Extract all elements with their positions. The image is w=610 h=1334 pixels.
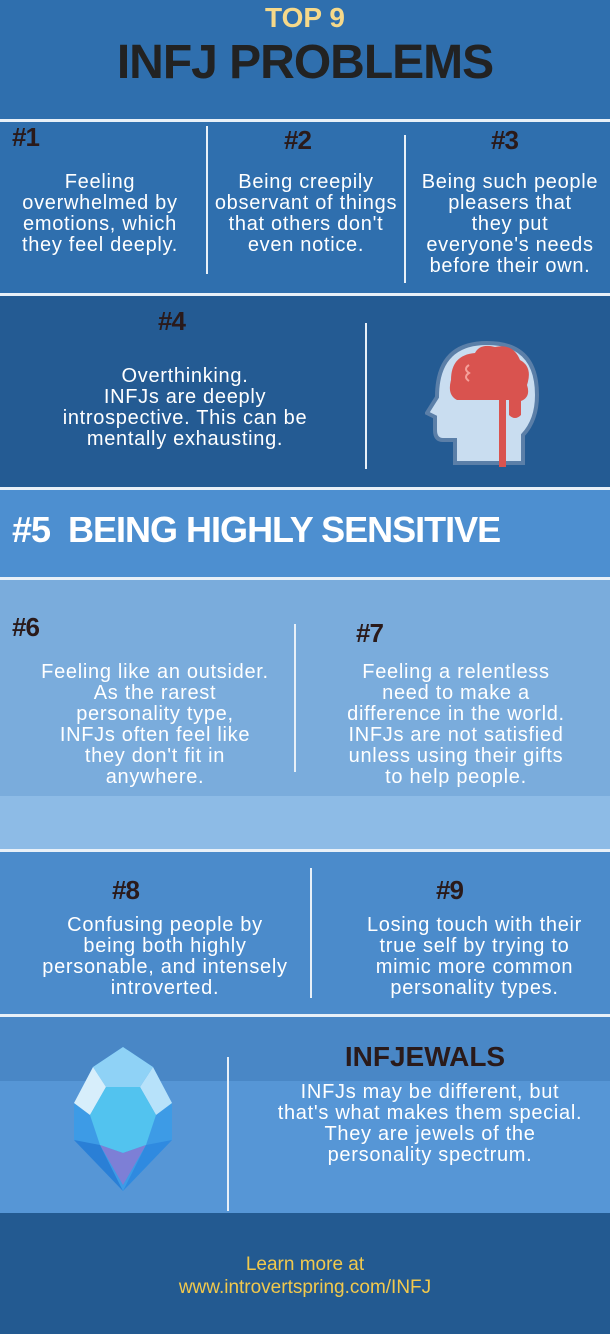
text #6: Feeling like an outsider.	[41, 661, 269, 683]
text #4: Overthinking.	[122, 365, 248, 387]
panel: #9	[367, 875, 582, 999]
text #9: mimic more common	[376, 956, 573, 978]
panel: #7	[347, 618, 565, 788]
text #7: Feeling a relentless	[362, 661, 550, 683]
text #7: difference in the world.	[347, 703, 565, 725]
text #6: As the rarest	[94, 682, 216, 704]
text #2: that others don't	[229, 213, 383, 235]
number #1: #1	[12, 122, 39, 152]
text #3: Being such people	[422, 171, 598, 193]
heading: INFJ problems: INFJ PROBLEMS	[117, 36, 493, 89]
heading: INFJewals: INFJEWALS	[345, 1041, 505, 1072]
number #8: #8	[112, 875, 139, 905]
panel: #2	[215, 125, 397, 256]
panel: #3	[422, 125, 598, 277]
text #1: they feel deeply.	[22, 234, 178, 256]
text #3: pleasers that	[448, 192, 572, 214]
text #2	[215, 171, 397, 256]
text #3: before their own.	[430, 255, 590, 277]
title	[117, 2, 493, 89]
text #6	[41, 661, 269, 788]
text #3: everyone's needs	[426, 234, 594, 256]
text #8: Confusing people by	[67, 914, 263, 936]
footer: learn more: www.introvertspring.com/INFJ	[179, 1277, 431, 1298]
heading: #5 being highly sensitive: #5 BEING HIGHLY SENSITIVE	[12, 509, 500, 550]
text #3: they put	[472, 213, 548, 235]
number #7: #7	[356, 618, 383, 648]
text #3	[422, 171, 598, 277]
number #6: #6	[12, 612, 39, 642]
text #6: personality type,	[76, 703, 234, 725]
panel: #1	[12, 122, 178, 256]
text #4: mentally exhausting.	[87, 428, 283, 450]
text #8: introverted.	[111, 977, 219, 999]
icon: head with brain	[425, 341, 539, 467]
text #8: personable, and intensely	[42, 956, 288, 978]
text #8: being both highly	[83, 935, 247, 957]
number #2: #2	[284, 125, 311, 155]
footer: learn more	[178, 1254, 431, 1298]
text #2: even notice.	[248, 234, 364, 256]
text #9: personality types.	[390, 977, 559, 999]
text: jewels: They are jewels of the	[324, 1123, 536, 1145]
text: jewels: that's what makes them special.	[278, 1102, 582, 1124]
text #7: unless using their gifts	[349, 745, 563, 767]
text #9: true self by trying to	[380, 935, 569, 957]
number #4: #4	[158, 306, 185, 336]
text #6: anywhere.	[106, 766, 204, 788]
subtitle: top 9: TOP 9	[265, 2, 345, 33]
panel: #8	[42, 875, 288, 999]
text #6: INFJs often feel like	[60, 724, 250, 746]
text #2: Being creepily	[238, 171, 374, 193]
icon: gem	[74, 1047, 172, 1191]
text #7: to help people.	[385, 766, 527, 788]
panel: #4	[63, 306, 307, 450]
text #1	[22, 171, 178, 256]
text #1: overwhelmed by	[22, 192, 178, 214]
number #9: #9	[436, 875, 463, 905]
text #9	[367, 914, 582, 999]
panel: INFJewals	[278, 1041, 582, 1166]
text #9: Losing touch with their	[367, 914, 582, 936]
text: jewels: INFJs may be different, but	[301, 1081, 559, 1103]
footer: learn more: Learn more at	[246, 1254, 364, 1275]
text #4: INFJs are deeply	[104, 386, 266, 408]
text #1: Feeling	[65, 171, 135, 193]
text: jewels	[278, 1081, 582, 1166]
text #7: need to make a	[382, 682, 530, 704]
text #2: observant of things	[215, 192, 397, 214]
text #8	[42, 914, 288, 999]
text #7: INFJs are not satisfied	[348, 724, 564, 746]
text #7	[347, 661, 565, 788]
text #4: introspective. This can be	[63, 407, 307, 429]
text #6: they don't fit in	[85, 745, 225, 767]
text #4	[63, 365, 307, 450]
number #3: #3	[491, 125, 518, 155]
text: jewels: personality spectrum.	[328, 1144, 532, 1166]
text #1: emotions, which	[23, 213, 177, 235]
panel: #6	[12, 612, 269, 788]
